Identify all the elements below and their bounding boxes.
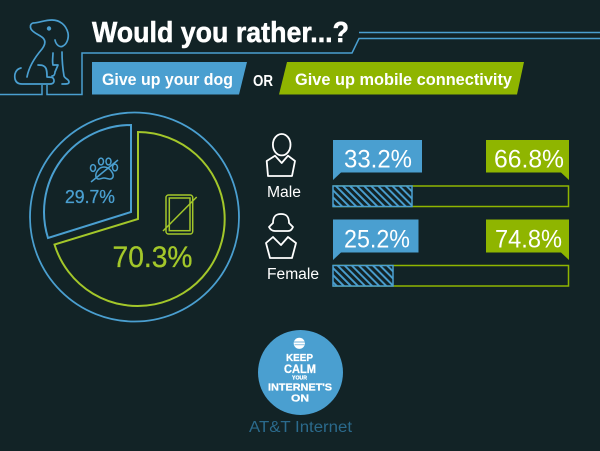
option: give up your dog (92, 62, 247, 94)
option: give up mobile connectivity: Give up mobile connectivity (295, 71, 513, 89)
title: Would you rather...? (92, 17, 349, 49)
badge: keep calm: CALM (284, 364, 316, 376)
label: 70.3%: 70.3% (112, 241, 192, 274)
female bar (333, 266, 568, 286)
pie chart (30, 112, 239, 322)
female callout: 25.2%: 25.2% (344, 226, 410, 254)
label: 29.7%: 29.7% (65, 186, 115, 207)
female callout: 74.8%: 74.8% (495, 226, 562, 254)
icon: female (266, 214, 296, 258)
icon: male (267, 134, 295, 176)
option: give up mobile connectivity (279, 62, 524, 94)
badge: keep calm: ON (291, 394, 309, 405)
male callout: 33.2%: 33.2% (344, 146, 412, 174)
label: female: Female (267, 266, 319, 283)
slice: mobile 70.3% (54, 132, 225, 306)
slice: dog 29.7% (44, 125, 131, 238)
icon: dog (15, 20, 69, 84)
option: give up your dog: Give up your dog (102, 71, 233, 89)
icon: crossed paw (90, 158, 118, 182)
female callout: 25.2% (333, 220, 418, 260)
male callout: 66.8%: 66.8% (494, 146, 564, 174)
icon: AT&T globe (294, 338, 305, 349)
icon: crossed tablet (163, 195, 197, 234)
badge: keep calm (258, 330, 343, 415)
badge: keep calm: YOUR (292, 376, 307, 382)
male bar (333, 186, 568, 206)
badge: keep calm: KEEP (286, 353, 313, 364)
badge: keep calm: INTERNET'S (268, 383, 332, 394)
female callout: 74.8% (486, 220, 569, 260)
label: male: Male (267, 184, 301, 201)
outer ring (30, 112, 239, 322)
male callout: 66.8% (486, 140, 569, 180)
or label: OR (253, 73, 273, 90)
male callout: 33.2% (333, 140, 422, 180)
header connector lines (0, 32, 600, 94)
brand: AT&T Internet: AT&T Internet (249, 419, 353, 436)
